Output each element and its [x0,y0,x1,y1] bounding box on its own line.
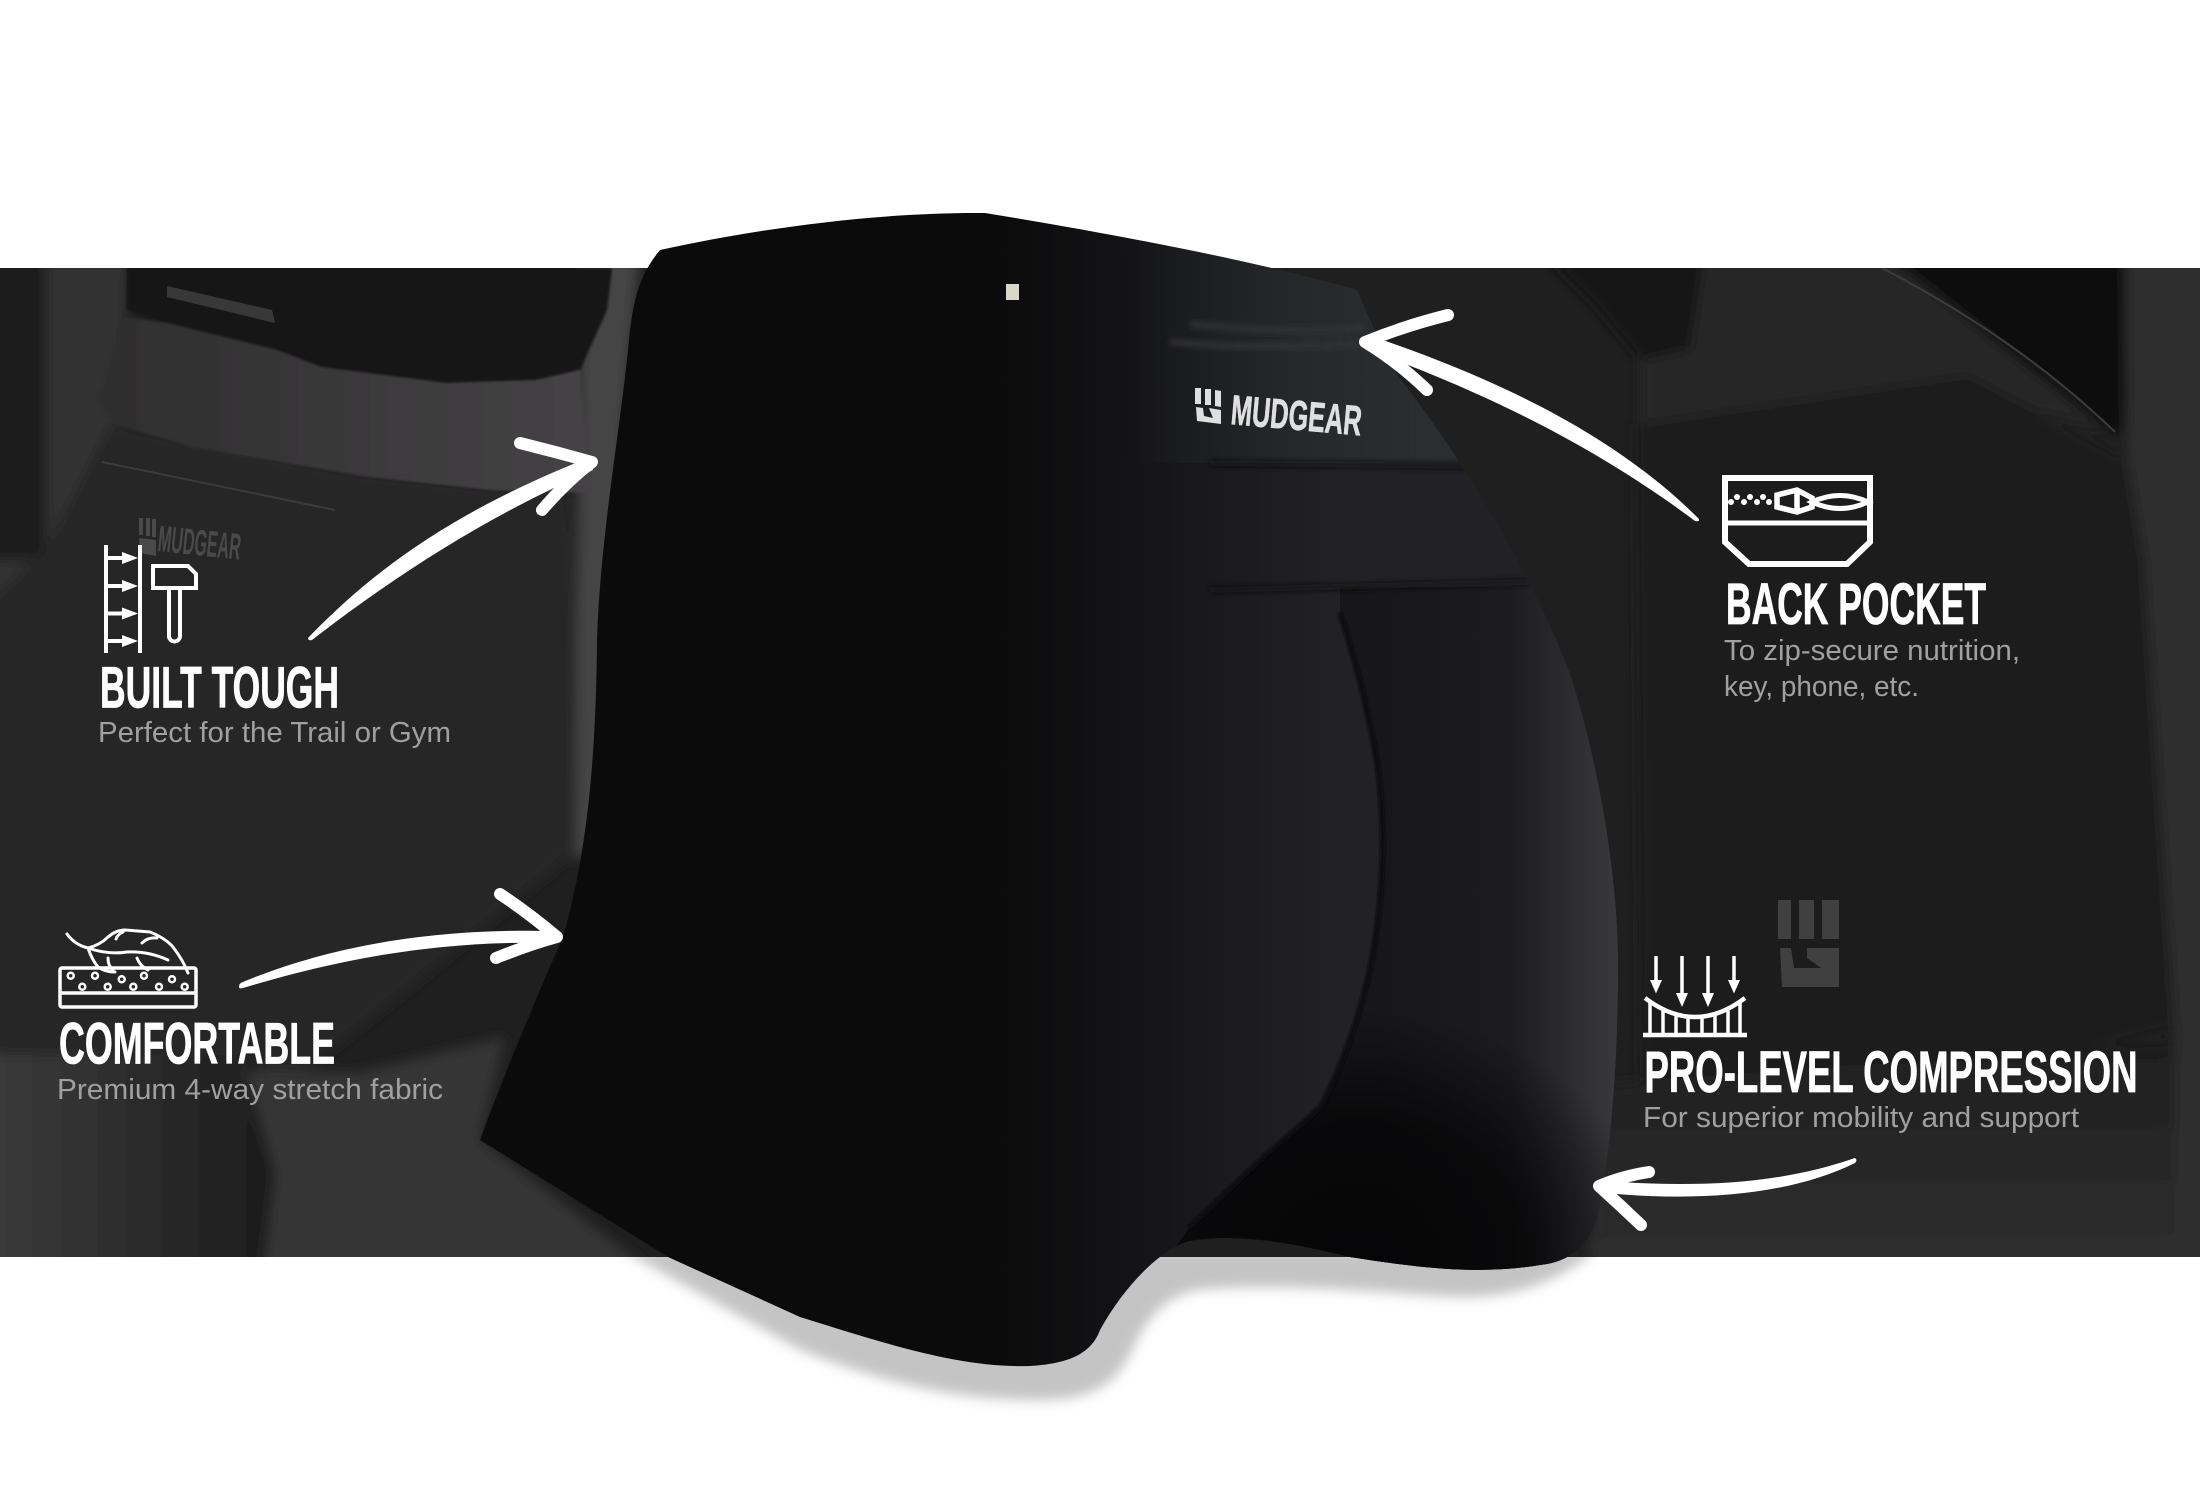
waistband highlight [1172,246,1459,462]
left figure: top [127,268,612,383]
description: Premium 4-way stretch fabric [57,1074,443,1106]
feature: back pocket: key, phone, etc. [1724,671,1919,703]
watermark: MudGear logo on left figure [139,518,243,568]
shorts logo [1195,386,1364,444]
left figure: skin [98,317,590,493]
arrow: back pocket [1365,315,1699,521]
feature: pro-level compression [1643,956,2138,1134]
left figure: top stripes [167,286,275,323]
right figure: top line [1882,268,2115,432]
feature: comfortable [57,930,443,1106]
icon: wall and hammer [106,545,196,653]
panel: dark photo band [0,250,2200,1300]
arrow: built tough [308,443,593,640]
icon: leaf on foam [60,930,196,1007]
waistband lower edge [1210,463,1530,590]
icon: compression bridge [1643,956,1747,1035]
shorts logo: MUDGEAR [1229,386,1364,444]
arrow: compression [1599,1158,1856,1225]
waistband fold lines [1170,324,1365,347]
description: For superior mobility and support [1643,1102,2079,1134]
heading: BUILT TOUGH [100,656,339,720]
icon: zip pocket [1725,478,1870,564]
back seam [1189,613,1383,1228]
left figure: zip line [102,462,335,510]
text: MUDGEAR [156,518,243,568]
product drop shadow [622,1250,1596,1400]
watermark: MudGear icon on right figure [1778,900,1839,987]
right cheek panel [1177,589,1618,1270]
heading: COMFORTABLE [59,1012,335,1076]
zipper pull [1006,284,1019,300]
product: black shorts [450,200,1660,1400]
heading: BACK POCKET [1726,572,1986,637]
arrow: comfortable [239,894,557,988]
feature: built tough [98,545,451,749]
description: Perfect for the Trail or Gym [98,717,451,749]
description: To zip-secure nutrition, [1724,635,2020,667]
feature: back pocket [1724,478,2020,703]
